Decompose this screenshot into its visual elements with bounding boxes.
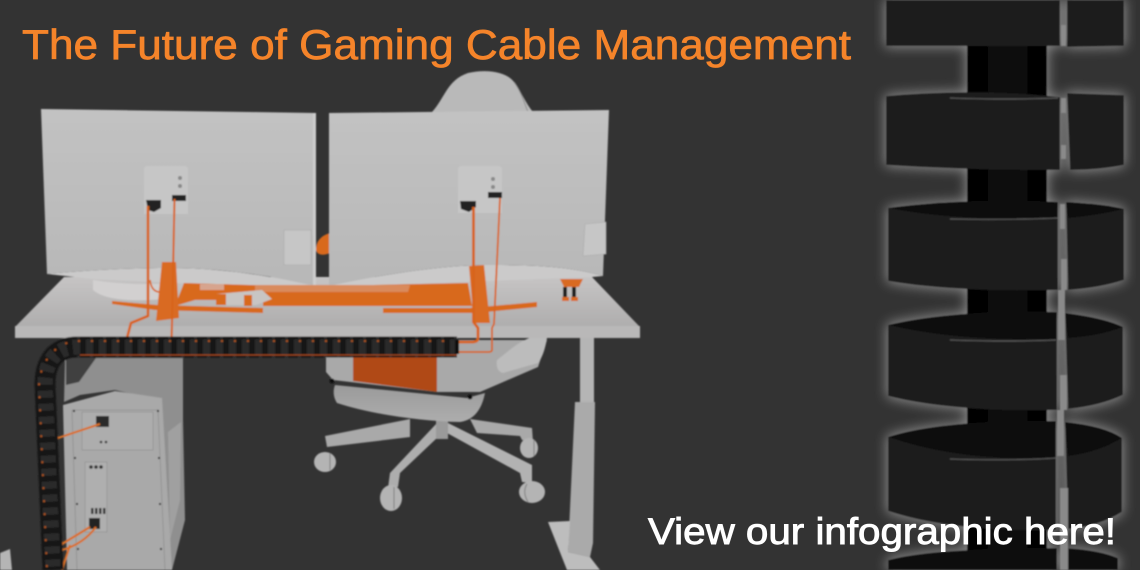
connector one — [146, 200, 161, 212]
area below monitor curve — [47, 268, 316, 287]
tower front panel — [63, 391, 172, 570]
spine core — [967, 40, 1047, 560]
spine ring 1 — [886, 0, 1060, 46]
chair orange seat panel — [353, 350, 437, 392]
chain lower notches — [70, 356, 457, 358]
chair casters — [314, 438, 545, 511]
mount screws — [491, 177, 495, 181]
call to action: View our infographic here! — [648, 510, 1116, 552]
chain end clip — [455, 340, 459, 354]
desk top surface — [15, 277, 640, 327]
right monitor — [329, 110, 609, 287]
cable spine illustration — [886, 0, 1124, 570]
side panel — [583, 222, 606, 256]
stand column left — [156, 262, 179, 321]
tower upper panel — [82, 412, 153, 450]
cable drag chain — [39, 338, 459, 570]
left monitor — [41, 109, 316, 287]
spine ring 6 — [888, 548, 1057, 570]
area below monitor curve — [329, 265, 603, 287]
upper leg column — [580, 338, 594, 403]
desk accessories — [93, 262, 583, 323]
tower back and top — [64, 358, 185, 570]
side panel — [284, 230, 311, 265]
small white object bottom left — [0, 549, 12, 570]
illustration: gaming desk setup — [0, 71, 640, 570]
spine ring 2 — [886, 92, 1060, 170]
PC tower — [58, 358, 185, 570]
chair footrest — [334, 385, 485, 422]
desk front edge — [15, 326, 640, 338]
spine ring 3 — [888, 201, 1058, 290]
tower small ports — [89, 441, 107, 514]
connector one — [460, 201, 476, 212]
chain orange accents — [39, 341, 457, 570]
chain inner cable — [80, 354, 457, 356]
cable right monitor one — [456, 207, 478, 342]
chair armrest — [316, 233, 330, 255]
chair pivot right — [468, 394, 472, 400]
chain body — [45, 347, 457, 570]
stand column right — [469, 265, 490, 323]
cable left monitor two — [171, 199, 174, 356]
tower lower panel — [85, 462, 107, 532]
desk foot — [548, 521, 600, 570]
monitor stand base left — [93, 280, 175, 300]
tower side vent — [168, 422, 181, 540]
chair headrest — [432, 71, 533, 112]
lower leg column — [568, 402, 595, 557]
chain edge notches — [70, 336, 457, 338]
ring inner openings — [888, 201, 1124, 459]
small keypad — [200, 284, 224, 290]
spine ring 4 — [888, 312, 1057, 410]
spine silhouette with glow — [886, 0, 1124, 570]
connector two — [488, 192, 502, 198]
title: The Future of Gaming Cable Management — [22, 21, 851, 68]
tower frame lines — [72, 410, 165, 570]
tower connector top — [96, 416, 109, 427]
tower connectors bottom — [89, 518, 100, 529]
tower screws — [73, 410, 162, 550]
cable branch left — [150, 280, 160, 292]
cable right monitor two — [456, 198, 500, 352]
chain link segments — [45, 347, 457, 570]
chair pivots — [330, 378, 334, 384]
stand foot left — [112, 301, 263, 313]
chair seat — [326, 340, 547, 392]
tower orange cables — [58, 424, 100, 570]
chair star base legs — [325, 418, 533, 488]
mount screws — [178, 176, 182, 180]
spine ring 5 — [888, 421, 1056, 530]
chair headrest seam — [514, 82, 528, 112]
desk mat — [175, 283, 472, 306]
orange monitor cables — [127, 198, 500, 356]
mount plate — [458, 166, 502, 213]
small adapter on desk — [560, 279, 583, 301]
stand foot right — [383, 302, 537, 313]
chair caster details — [330, 440, 534, 509]
connector two — [172, 195, 186, 201]
monitor back — [329, 110, 609, 286]
monitor back — [41, 109, 316, 286]
right edge highlight — [313, 113, 316, 286]
ring front rims — [950, 98, 1058, 460]
game controller — [216, 290, 272, 305]
ring gap highlights — [1057, 25, 1068, 570]
gaming chair — [314, 71, 547, 511]
desk leg — [548, 338, 600, 570]
keyboard — [255, 285, 410, 292]
chair side bracket — [497, 337, 547, 373]
mount plate — [144, 166, 188, 214]
desk — [15, 277, 640, 338]
cable left monitor one — [127, 206, 148, 338]
